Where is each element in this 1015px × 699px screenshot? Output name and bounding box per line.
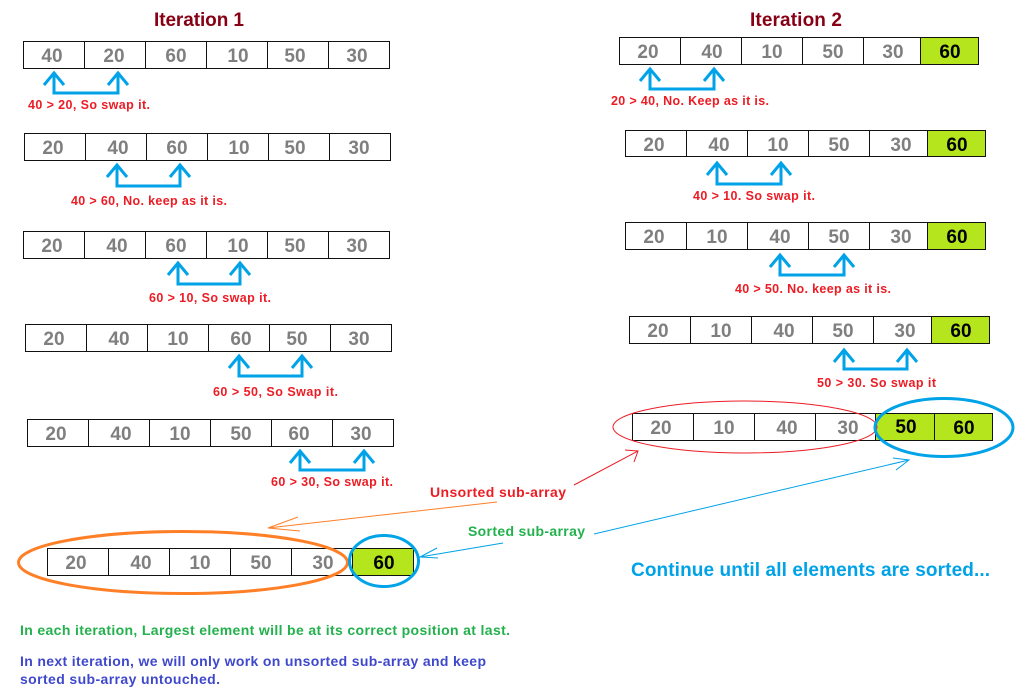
iteration 1 step 3: 40 — [106, 236, 128, 257]
iteration 1 step 5: 60 — [288, 424, 310, 445]
iteration 1 step 4 — [26, 324, 392, 399]
note: largest element: In each iteration, Largest element will be at its correct position at last. — [20, 622, 510, 638]
iteration 2 step 1: 40 — [701, 42, 723, 63]
iteration 1 step 2: 60 — [166, 138, 188, 159]
iteration 2 result array: 50 — [895, 417, 917, 438]
iteration 1 step 1: 40 — [41, 46, 63, 67]
iteration 2 step 4: 50 > 30. So swap it — [817, 376, 937, 390]
label: sorted sub-array: Sorted sub-array — [468, 523, 585, 539]
heading: iteration 1: Iteration 1 — [154, 10, 244, 31]
iteration 1 step 5: 50 — [230, 424, 252, 445]
iteration 2 result array: 60 — [953, 418, 975, 439]
iteration 2 step 1 — [611, 38, 978, 108]
iteration 2 result array — [632, 414, 992, 440]
iteration 1 step 3: 20 — [41, 236, 63, 257]
iteration 2 step 2: 40 > 10. So swap it. — [693, 189, 815, 203]
iteration 1 step 1 — [24, 42, 390, 112]
iteration 1 step 3 — [24, 232, 390, 305]
iteration 1 step 1: 50 — [284, 46, 306, 67]
iteration 1 step 1: 10 — [227, 46, 249, 67]
iteration 1 step 1: 20 — [103, 46, 125, 67]
iteration 1 step 4: 50 — [286, 329, 308, 350]
iteration 2 step 1: 60 — [939, 42, 961, 63]
iteration 2 result array: 20 — [650, 418, 672, 439]
iteration 1 result array: 10 — [189, 553, 211, 574]
iteration 2 step 2: 10 — [767, 135, 789, 156]
iteration 2 step 4 — [630, 316, 990, 390]
iteration 1 step 2: 50 — [284, 138, 306, 159]
iteration 2 step 3: 40 — [769, 227, 791, 248]
iteration 2 step 2: 50 — [828, 135, 850, 156]
callout: blue ellipse sorted — [350, 536, 418, 586]
note: next iteration: sorted sub-array untouched. — [20, 671, 220, 687]
iteration 1 step 4: 60 — [230, 329, 252, 350]
iteration 1 step 3: 30 — [346, 236, 368, 257]
arrow: to red ellipse — [574, 450, 638, 485]
iteration 2 step 4: 10 — [710, 321, 732, 342]
iteration 2 step 1: 30 — [882, 42, 904, 63]
iteration 2 result array: 40 — [776, 418, 798, 439]
iteration 1 step 2: 10 — [228, 138, 250, 159]
iteration 1 result array: 50 — [250, 553, 272, 574]
callout text: continue: Continue until all elements are sorted... — [631, 560, 990, 581]
iteration 1 step 5: 20 — [45, 424, 67, 445]
iteration 2 result array: 30 — [837, 418, 859, 439]
iteration 2 step 4: 30 — [894, 321, 916, 342]
iteration 2 step 3: 20 — [643, 227, 665, 248]
iteration 2 step 3: 40 > 50. No. keep as it is. — [735, 282, 891, 296]
callout: orange ellipse unsorted — [18, 532, 348, 594]
iteration 2 step 2: 60 — [946, 135, 968, 156]
callout: blue ellipse sorted — [875, 398, 1013, 456]
iteration 1 step 4: 20 — [43, 329, 65, 350]
iteration 2 step 3 — [626, 222, 986, 296]
iteration 1 step 2: 40 — [107, 138, 129, 159]
iteration 1 step 4: 30 — [348, 329, 370, 350]
iteration 2 step 4: 60 — [950, 321, 972, 342]
iteration 2 step 2: 20 — [643, 135, 665, 156]
iteration 2 step 2: 40 — [708, 135, 730, 156]
iteration 1 step 4: 40 — [108, 329, 130, 350]
iteration 1 step 2 — [24, 134, 390, 208]
note: next iteration: In next iteration, we will only work on unsorted sub-array and keep — [20, 653, 486, 669]
iteration 2 step 2: 30 — [890, 135, 912, 156]
iteration 2 step 4: 20 — [647, 321, 669, 342]
iteration 2 step 2 — [626, 130, 986, 203]
iteration 1 step 3: 60 — [165, 236, 187, 257]
iteration 2 step 1: 50 — [822, 42, 844, 63]
arrow: to large blue ellipse — [594, 458, 909, 534]
iteration 1 result array: 60 — [373, 553, 395, 574]
label: unsorted sub-array: Unsorted sub-array — [430, 484, 566, 500]
iteration 1 result array — [48, 548, 414, 576]
iteration 2 step 1: 20 — [637, 42, 659, 63]
iteration 1 step 5: 10 — [169, 424, 191, 445]
iteration 1 result array: 40 — [130, 553, 152, 574]
iteration 1 step 3: 50 — [284, 236, 306, 257]
iteration 1 step 3: 60 > 10, So swap it. — [149, 291, 271, 305]
iteration 2 step 3: 10 — [706, 227, 728, 248]
iteration 2 step 1: 10 — [761, 42, 783, 63]
iteration 2 step 3: 60 — [946, 227, 968, 248]
arrow: to orange ellipse — [268, 502, 497, 531]
iteration 1 step 4: 10 — [167, 329, 189, 350]
iteration 2 step 3: 50 — [828, 227, 850, 248]
iteration 1 result array: 20 — [65, 553, 87, 574]
iteration 1 step 2: 40 > 60, No. keep as it is. — [71, 194, 227, 208]
iteration 1 step 5 — [28, 420, 394, 489]
iteration 2 result array: 10 — [713, 418, 735, 439]
iteration 1 step 5: 60 > 30, So swap it. — [271, 475, 393, 489]
callout: red ellipse unsorted — [613, 401, 877, 453]
arrow: to small blue ellipse — [420, 543, 503, 558]
iteration 1 step 1: 30 — [346, 46, 368, 67]
note: next iteration — [20, 653, 486, 687]
iteration 1 result array: 30 — [312, 553, 334, 574]
iteration 1 step 2: 30 — [348, 138, 370, 159]
heading: iteration 2: Iteration 2 — [750, 10, 842, 31]
iteration 1 step 1: 40 > 20, So swap it. — [28, 98, 150, 112]
iteration 1 step 2: 20 — [42, 138, 64, 159]
iteration 2 step 4: 50 — [832, 321, 854, 342]
iteration 1 step 3: 10 — [227, 236, 249, 257]
iteration 1 step 1: 60 — [165, 46, 187, 67]
iteration 2 step 4: 40 — [773, 321, 795, 342]
iteration 1 step 4: 60 > 50, So Swap it. — [213, 385, 338, 399]
iteration 1 step 5: 30 — [350, 424, 372, 445]
iteration 2 step 1: 20 > 40, No. Keep as it is. — [611, 94, 769, 108]
iteration 2 step 3: 30 — [890, 227, 912, 248]
iteration 1 step 5: 40 — [110, 424, 132, 445]
